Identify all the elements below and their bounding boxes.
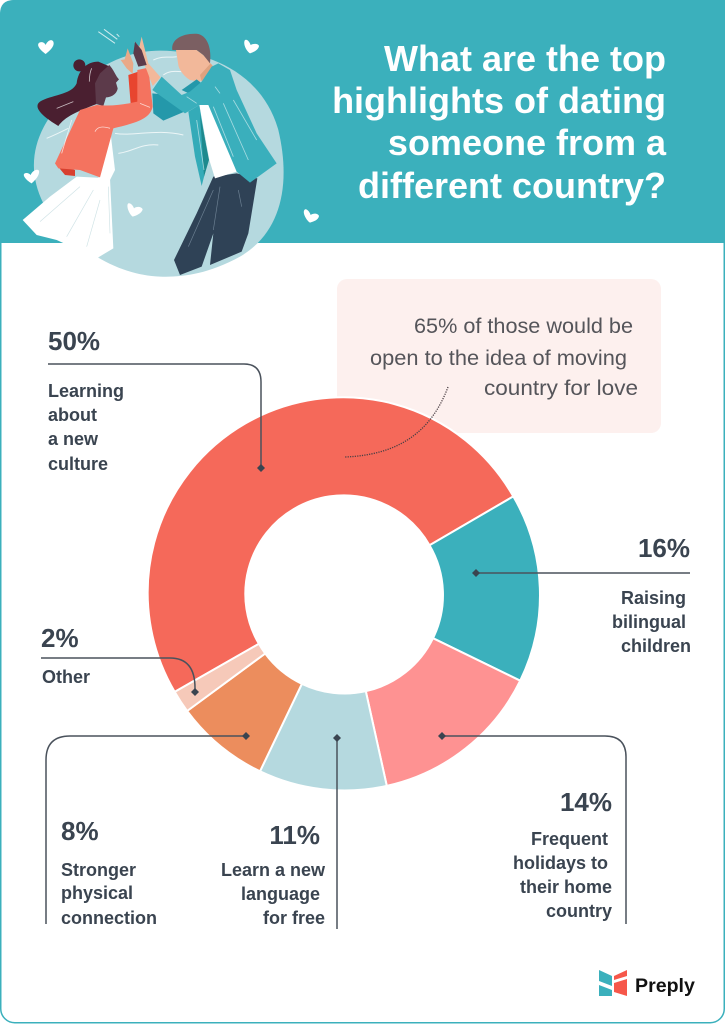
- label: 50%: about: [48, 405, 97, 425]
- label: 14%: holidays to: [513, 853, 608, 873]
- label: 8%: physical: [61, 883, 133, 903]
- callout box: 65% of those would be: [414, 315, 633, 338]
- callout box: open to the idea of moving: [370, 347, 627, 370]
- label: 14%: Frequent: [531, 829, 608, 849]
- title: different country?: [358, 165, 666, 206]
- label: 11%: for free: [263, 908, 325, 928]
- label: 14%: [438, 732, 626, 924]
- segment: 11% learn a new language: [260, 684, 387, 791]
- title: What are the top: [384, 38, 666, 79]
- hearts: [24, 40, 319, 223]
- segment: 16% raising bilingual children: [430, 496, 540, 681]
- label: 8%: connection: [61, 908, 157, 928]
- callout box: country for love: [484, 377, 638, 400]
- label: 2%: [41, 623, 199, 696]
- label: 16%: 16%: [638, 533, 690, 563]
- label: 2%: 2%: [41, 623, 79, 653]
- illustration: couple high-five: [23, 29, 319, 277]
- Preply logo: [599, 970, 695, 997]
- header band: [0, 0, 725, 243]
- Preply logo: Preply: [635, 975, 695, 997]
- label: 16%: bilingual: [612, 612, 686, 632]
- man: [133, 34, 277, 275]
- label: 50%: culture: [48, 454, 108, 474]
- illustration backdrop circle: [34, 51, 284, 277]
- title: highlights of dating: [332, 80, 666, 121]
- label: 16%: Raising: [621, 588, 686, 608]
- label: 16%: children: [621, 636, 691, 656]
- label: 50%: Learning: [48, 381, 124, 401]
- label: 50%: 50%: [48, 326, 100, 356]
- label: 16%: [472, 533, 691, 656]
- label: 11%: 11%: [269, 820, 320, 850]
- donut chart: [148, 397, 540, 791]
- icon: open book: [599, 970, 627, 996]
- segment: 2% other: [175, 644, 265, 711]
- label: 8%: 8%: [61, 816, 99, 846]
- label: 50%: [48, 326, 265, 474]
- callout box: [337, 279, 661, 433]
- label: 8%: [46, 732, 250, 928]
- label: 14%: 14%: [560, 787, 612, 817]
- dotted callout connector: [345, 387, 448, 457]
- label: 2%: Other: [42, 667, 90, 687]
- title: someone from a: [388, 122, 667, 163]
- segment: 50% learning about a new culture: [148, 397, 513, 692]
- label: 50%: a new: [48, 429, 99, 449]
- label: 14%: their home: [520, 877, 612, 897]
- motion and wind lines: [47, 29, 183, 153]
- label: 14%: country: [546, 901, 612, 921]
- label: 11%: [221, 734, 341, 929]
- segment: 14% frequent holidays: [366, 638, 520, 786]
- title: [332, 38, 667, 206]
- label: 11%: Learn a new: [221, 860, 326, 880]
- label: 11%: language: [241, 884, 320, 904]
- segment: 8% stronger physical connection: [187, 654, 302, 771]
- woman: [23, 48, 153, 258]
- label: 8%: Stronger: [61, 860, 136, 880]
